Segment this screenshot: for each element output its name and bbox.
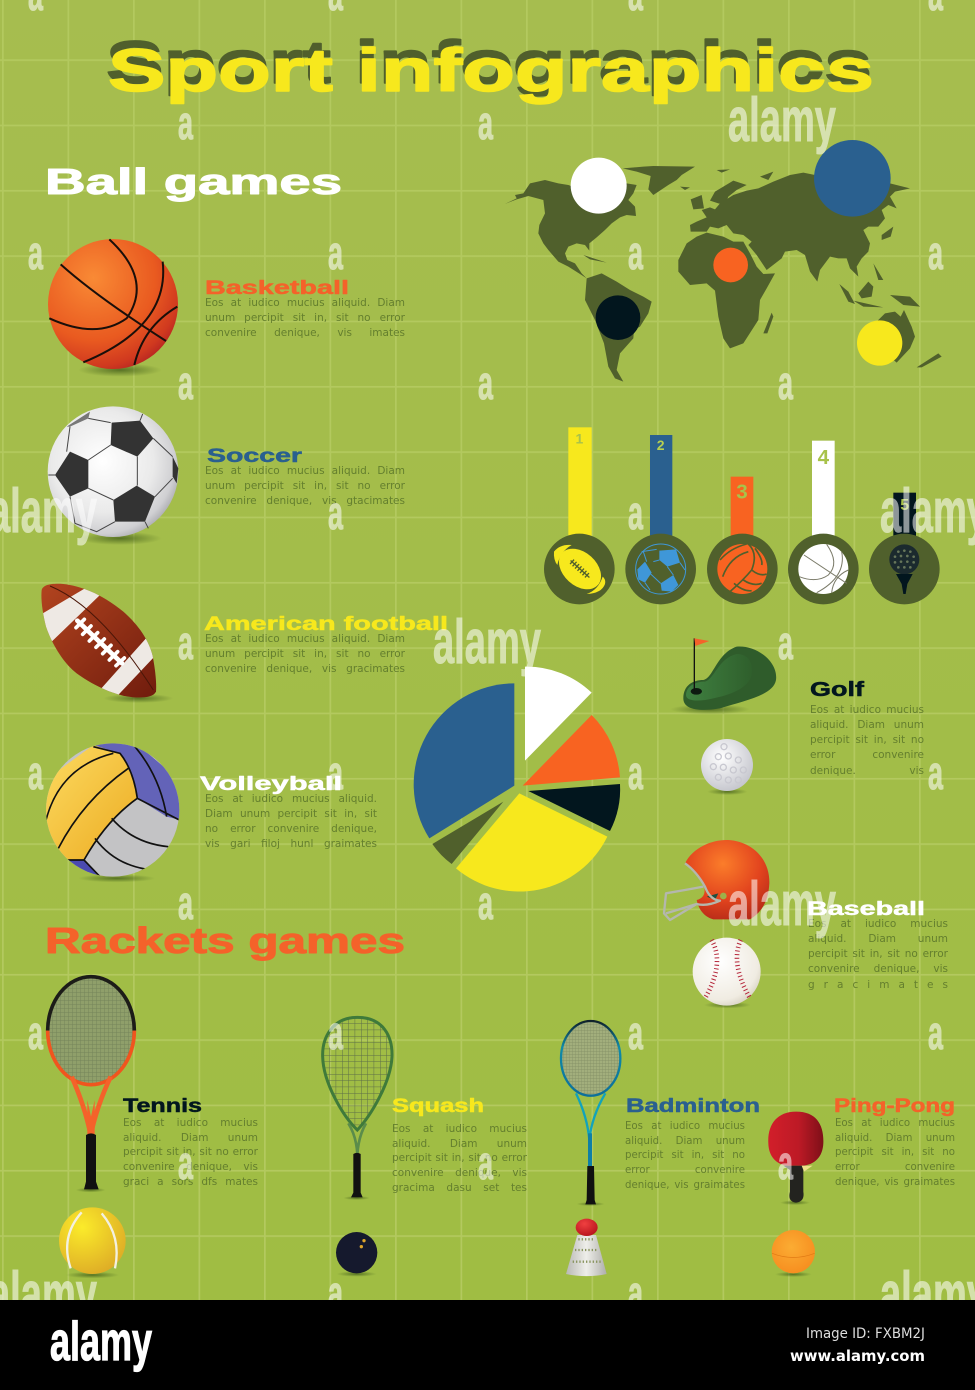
text: volleyball description: Eos at iudico mucius aliquid. bbox=[205, 793, 377, 805]
text: squash description: aliquid. Diam unum bbox=[392, 1138, 527, 1150]
text: baseball description: aliquid. Diam unum bbox=[808, 933, 948, 945]
bar 2 blue bbox=[650, 435, 672, 538]
text: golf description: percipit sit in, sit no bbox=[810, 734, 924, 746]
text: badminton description: error convenire bbox=[625, 1165, 745, 1176]
text: badminton description: denique, vis graimates bbox=[625, 1180, 745, 1191]
watermark: a bbox=[628, 1006, 643, 1059]
bubble: white bbox=[571, 158, 627, 214]
label: Ping-Pong: Ping-Pong bbox=[834, 1096, 955, 1117]
text: ping-pong description bbox=[835, 1118, 955, 1188]
title: Sport infographics bbox=[106, 29, 872, 96]
text: basketball description: Eos at iudico mucius aliquid. Diam bbox=[205, 297, 405, 309]
watermark: a bbox=[778, 616, 793, 669]
text: ping-pong description: denique, vis graimates bbox=[835, 1177, 955, 1188]
label: Baseball: Baseball bbox=[807, 899, 925, 920]
footer logo: alamy bbox=[50, 1310, 152, 1372]
label: Volleyball: Volleyball bbox=[200, 774, 342, 795]
icon: golf tee bbox=[869, 534, 940, 604]
text: baseball description: Eos at iudico mucius bbox=[808, 918, 948, 930]
watermark: a bbox=[178, 96, 193, 149]
bar 2 blue: 2 bbox=[657, 437, 665, 453]
text: football description bbox=[205, 633, 405, 675]
text: squash description: Eos at iudico mucius bbox=[392, 1123, 527, 1135]
text: ping-pong description: Eos at iudico mucius bbox=[835, 1118, 955, 1129]
text: football description: unum percipit sit in, sit no error bbox=[205, 648, 405, 660]
watermark: a bbox=[328, 1006, 343, 1059]
basketball bbox=[48, 239, 178, 377]
wedge: white bbox=[525, 667, 592, 761]
watermark: alamy bbox=[728, 86, 836, 155]
text: golf description: denique. vis bbox=[810, 765, 924, 777]
watermark: a bbox=[928, 746, 943, 799]
baseball bbox=[693, 938, 761, 1008]
text: basketball description: convenire denique, vis imates bbox=[205, 327, 405, 339]
heading: Ball games: Ball games bbox=[45, 161, 342, 202]
volleyball bbox=[40, 740, 183, 882]
watermark: a bbox=[478, 1136, 493, 1189]
text: football description: Eos at iudico mucius aliquid. Diam bbox=[205, 633, 405, 645]
watermark: a bbox=[178, 1136, 193, 1189]
label: Tennis: Tennis bbox=[123, 1096, 202, 1117]
watermark: a bbox=[628, 1266, 643, 1319]
text: golf description: Eos at iudico mucius bbox=[810, 704, 924, 716]
watermark: a bbox=[328, 746, 343, 799]
shuttlecock bbox=[566, 1219, 607, 1276]
american football bbox=[40, 584, 173, 703]
text: baseball description: percipit sit in, sit no error bbox=[808, 948, 948, 960]
text: tennis description: aliquid. Diam unum bbox=[123, 1132, 258, 1144]
label: American football: American football bbox=[204, 614, 448, 635]
watermark: alamy bbox=[433, 608, 541, 677]
badminton racket bbox=[561, 1021, 620, 1206]
wedge: yellow bbox=[456, 793, 607, 892]
title: Sport infographics bbox=[108, 37, 874, 104]
icon: volleyball bbox=[707, 534, 778, 604]
text: tennis description: percipit sit in, sit no error bbox=[123, 1146, 258, 1158]
watermark: a bbox=[178, 356, 193, 409]
text: basketball description bbox=[205, 297, 405, 339]
watermark: a bbox=[178, 876, 193, 929]
squash racket bbox=[323, 1017, 392, 1200]
footer url: www.alamy.com bbox=[790, 1347, 925, 1365]
bar 4 white: 4 bbox=[818, 446, 830, 469]
bar 4 white bbox=[812, 441, 835, 537]
heading: Rackets games: Rackets games bbox=[45, 920, 405, 961]
text: ping-pong description: percipit sit in, sit no bbox=[835, 1147, 955, 1158]
text: soccer description: unum percipit sit in, sit no error bbox=[205, 480, 405, 492]
golf ball bbox=[701, 739, 753, 795]
text: badminton description: Eos at iudico mucius bbox=[625, 1121, 745, 1132]
bar 5 black: 5 bbox=[900, 497, 909, 514]
watermark: a bbox=[28, 746, 43, 799]
wedge: blue bbox=[414, 683, 514, 838]
text: soccer description: convenire denique, vis gtacimates bbox=[205, 495, 405, 507]
footer bar bbox=[0, 1300, 975, 1390]
watermark: a bbox=[778, 1136, 793, 1189]
text: soccer description bbox=[205, 465, 405, 507]
bubble: black bbox=[596, 295, 640, 340]
watermark: a bbox=[478, 96, 493, 149]
text: golf description: error convenire bbox=[810, 749, 924, 761]
text: football description: convenire denique, vis gracimates bbox=[205, 663, 405, 675]
label: Squash: Squash bbox=[392, 1096, 484, 1117]
soccer ball bbox=[48, 406, 178, 545]
text: ping-pong description: aliquid. Diam unum bbox=[835, 1133, 955, 1144]
squash ball bbox=[336, 1232, 377, 1277]
baseball helmet bbox=[664, 840, 769, 920]
icon: basketball bbox=[788, 534, 859, 604]
label: Golf: Golf bbox=[810, 679, 864, 701]
watermark: a bbox=[328, 226, 343, 279]
bubble: orange bbox=[713, 248, 748, 282]
text: golf description: aliquid. Diam unum bbox=[810, 719, 924, 731]
watermark: a bbox=[928, 226, 943, 279]
wedge: olive bbox=[432, 802, 503, 864]
text: volleyball description: no error convenire denique, bbox=[205, 823, 377, 835]
bar 3 orange: 3 bbox=[736, 481, 748, 504]
watermark: a bbox=[628, 746, 643, 799]
tennis racket bbox=[48, 977, 134, 1192]
text: squash description: percipit sit in, sit no error bbox=[392, 1152, 527, 1164]
label: Soccer: Soccer bbox=[207, 446, 303, 467]
icon: football bbox=[544, 534, 615, 604]
text: ping-pong description: error convenire bbox=[835, 1162, 955, 1173]
text: tennis description: Eos at iudico mucius bbox=[123, 1117, 258, 1129]
ranking bars with icons bbox=[544, 427, 940, 604]
bubble: yellow bbox=[857, 320, 902, 366]
bar 1 yellow: 1 bbox=[575, 430, 583, 446]
watermark: a bbox=[628, 226, 643, 279]
text: baseball description: g r a c i m a t e s bbox=[808, 979, 948, 991]
ping-pong ball bbox=[772, 1230, 815, 1277]
watermark: a bbox=[478, 356, 493, 409]
text: badminton description bbox=[625, 1121, 745, 1191]
label: Badminton: Badminton bbox=[626, 1096, 760, 1117]
icon: soccer ball bbox=[625, 534, 696, 604]
text: volleyball description: vis gari filoj hunl graimates bbox=[205, 838, 377, 850]
text: squash description: convenire denique, vis bbox=[392, 1167, 527, 1179]
watermark: a bbox=[478, 876, 493, 929]
text: squash description: gracima dasu set tes bbox=[392, 1182, 527, 1194]
watermark: alamy bbox=[728, 870, 836, 939]
wedge: black bbox=[528, 784, 620, 831]
watermark: a bbox=[328, 486, 343, 539]
text: squash description bbox=[392, 1123, 527, 1194]
text: basketball description: unum percipit sit in, sit no error bbox=[205, 312, 405, 324]
wedge: orange bbox=[523, 715, 620, 786]
watermark: a bbox=[28, 1006, 43, 1059]
tennis ball bbox=[59, 1207, 126, 1278]
text: tennis description: convenire denique, vis bbox=[123, 1161, 258, 1173]
watermark: a bbox=[628, 486, 643, 539]
map landmasses bbox=[505, 166, 942, 382]
watermark: a bbox=[928, 1006, 943, 1059]
text: badminton description: aliquid. Diam unum bbox=[625, 1136, 745, 1147]
title bbox=[106, 29, 874, 104]
text: volleyball description bbox=[205, 793, 377, 850]
world map with bubbles bbox=[505, 140, 942, 382]
watermark: a bbox=[778, 356, 793, 409]
text: baseball description bbox=[808, 918, 948, 991]
pie chart bbox=[414, 667, 620, 892]
bubble: blue bbox=[814, 140, 891, 217]
text: baseball description: convenire denique, vis bbox=[808, 963, 948, 975]
watermark: a bbox=[178, 616, 193, 669]
label: Basketball: Basketball bbox=[205, 278, 349, 299]
bar 3 orange bbox=[731, 477, 753, 538]
ping-pong paddle bbox=[768, 1112, 823, 1205]
text: volleyball description: Diam unum percipit sit in, sit bbox=[205, 808, 377, 820]
bar 1 yellow bbox=[568, 427, 592, 537]
text: tennis description: graci a sors dfs mates bbox=[123, 1176, 258, 1188]
text: soccer description: Eos at iudico mucius aliquid. Diam bbox=[205, 465, 405, 477]
footer image id: Image ID: FXBM2J bbox=[806, 1326, 925, 1342]
text: golf description bbox=[810, 704, 924, 777]
bar 5 black bbox=[893, 493, 916, 538]
text: badminton description: percipit sit in, sit no bbox=[625, 1150, 745, 1161]
watermark: a bbox=[328, 1266, 343, 1319]
text: tennis description bbox=[123, 1117, 258, 1188]
golf green with flag bbox=[670, 638, 776, 714]
watermark: a bbox=[28, 226, 43, 279]
